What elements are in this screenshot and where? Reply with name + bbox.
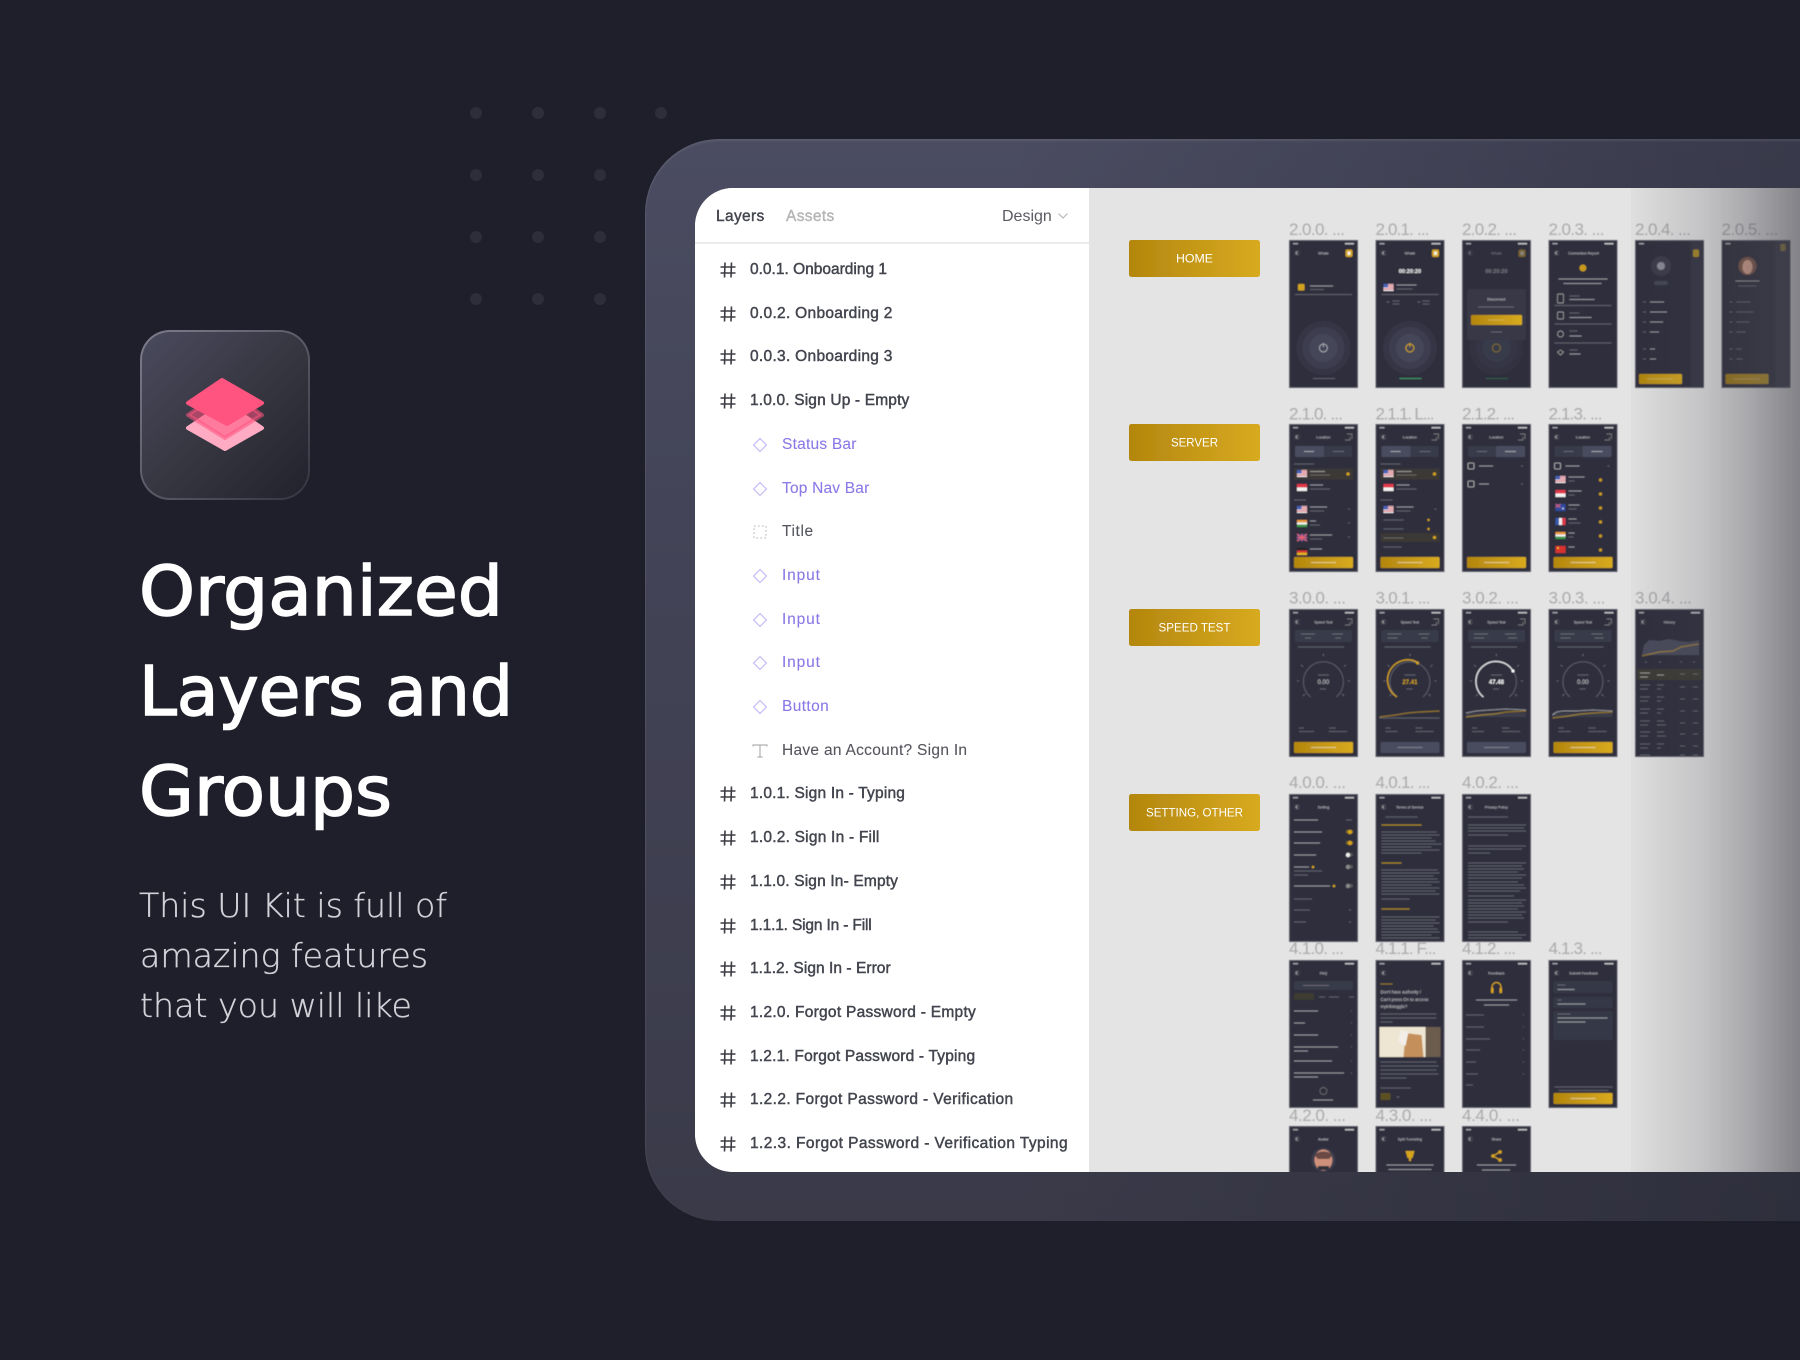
- frame labels: 3.0.2. ...: [1462, 588, 1519, 608]
- screen 3.0.0 speed test idle: Speed Test: [1314, 620, 1333, 624]
- device frame: [645, 139, 1800, 1221]
- screen 2.0.1 connected: 00:20:20: [1399, 269, 1421, 275]
- frame labels: 3.0.1. ...: [1376, 588, 1430, 608]
- screen 2.1.0 location: Location: [1316, 436, 1330, 440]
- component: Input: [752, 654, 821, 671]
- frame labels: 2.0.2. ...: [1462, 220, 1517, 239]
- screen 3.0.2 speed test upload: 47.48: [1489, 680, 1505, 686]
- screen 4.0.0 setting: [1289, 794, 1358, 942]
- subtitle text: This UI Kit is full of: [139, 887, 448, 925]
- screen 4.1.1 article: [1376, 960, 1444, 1108]
- frame labels: 3.0.4. ...: [1635, 588, 1692, 608]
- layer: 1.2.2. Forgot Password - Verification: 1.2.2. Forgot Password - Verification: [750, 1091, 1014, 1108]
- group: Title: Title: [782, 523, 814, 540]
- frame labels: 2.1.0. ...: [1289, 404, 1343, 424]
- screen: figma window: [695, 188, 1800, 1172]
- frame labels: 4.4.0. ...: [1462, 1106, 1520, 1125]
- screen 2.0.3 connection report: [1549, 240, 1617, 388]
- component: Input: Input: [782, 567, 821, 584]
- phone screens: [1289, 240, 1790, 1274]
- title: Organized: [139, 552, 503, 632]
- screen 2.1.1 location expanded: [1376, 424, 1444, 572]
- screen 3.0.4 history: [1635, 609, 1704, 757]
- component: Input: Input: [782, 611, 821, 628]
- frame labels: 2.0.4. ...: [1635, 220, 1691, 239]
- screen 4.1.0 faq: FAQ: [1320, 972, 1327, 976]
- icon: layers app tile: [140, 330, 310, 500]
- subtitle text: that you will like: [140, 987, 412, 1025]
- screen 4.1.3 submit feedback: Submit Feedback: [1569, 972, 1598, 976]
- text layer: Have an Account? Sign In: Have an Account? Sign In: [782, 742, 967, 759]
- title: [139, 552, 513, 832]
- screen 2.0.3 connection report: Connection Report: [1568, 252, 1599, 256]
- screen 2.0.1 connected: Whale: [1405, 252, 1415, 256]
- frame labels: 2.0.5. ...: [1722, 220, 1778, 239]
- tab: Design: Design: [1002, 208, 1052, 224]
- layer: 0.0.2. Onboarding 2: 0.0.2. Onboarding 2: [750, 305, 893, 322]
- panel: canvas with screens: [1129, 188, 1800, 1172]
- screen 2.0.5 profile menu: [1722, 240, 1790, 388]
- panel: layers sidebar: [695, 188, 1089, 1172]
- frame labels: [1289, 220, 1778, 1125]
- screen 4.4.0 share: [1462, 1126, 1531, 1274]
- frame labels: 3.0.3. ...: [1548, 588, 1606, 608]
- frame labels: 3.0.0. ...: [1289, 588, 1346, 608]
- component: Status Bar: Status Bar: [782, 436, 857, 453]
- header divider: [695, 242, 1089, 244]
- frame labels: 4.1.1. F...: [1376, 939, 1436, 958]
- subtitle text: amazing features: [140, 937, 428, 975]
- frame labels: 2.1.2. ...: [1462, 404, 1515, 424]
- layer: 1.2.1. Forgot Password - Typing: 1.2.1. Forgot Password - Typing: [750, 1048, 975, 1065]
- layer: 1.2.0. Forgot Password - Empty: 1.2.0. Forgot Password - Empty: [750, 1004, 976, 1021]
- screen 3.0.3 speed test done: 0.00: [1577, 680, 1589, 686]
- screen 4.2.0 avatar: [1289, 1126, 1358, 1274]
- component: Input: [752, 611, 821, 628]
- frame labels: 4.3.0. ...: [1376, 1106, 1432, 1125]
- screen 4.0.2 privacy policy: [1462, 794, 1531, 942]
- screen 4.3.0 split tunneling: Split Tunneling: [1398, 1138, 1422, 1142]
- screen 2.1.3 location list: Location: [1576, 436, 1590, 440]
- frame labels: 2.0.3. ...: [1548, 220, 1604, 239]
- frame labels: 4.1.2. ...: [1462, 939, 1516, 958]
- screen 3.0.0 speed test idle: 0.00: [1318, 680, 1330, 686]
- title: Groups: [139, 752, 392, 832]
- group: Title: [753, 523, 814, 540]
- screen 2.0.2 disconnect modal: Disconnect: [1487, 298, 1506, 302]
- layer: 1.1.2. Sign In - Error: 1.1.2. Sign In - Error: [750, 960, 891, 977]
- layer: 1.1.0. Sign In- Empty: 1.1.0. Sign In- Empty: [750, 873, 898, 890]
- screen 3.0.1 speed test download: [1376, 609, 1444, 757]
- section button: SETTING, OTHER: [1129, 794, 1260, 831]
- screen 4.4.0 share: Share: [1491, 1138, 1501, 1142]
- screen 3.0.3 speed test done: [1549, 609, 1617, 757]
- screen 2.1.2 location search: [1462, 424, 1531, 572]
- section button: SETTING, OTHER: SETTING, OTHER: [1146, 808, 1243, 820]
- subtitle text: [139, 887, 448, 1025]
- section button: SPEED TEST: SPEED TEST: [1158, 622, 1230, 634]
- component: Button: Button: [782, 698, 829, 715]
- frame labels: 2.1.1. L...: [1376, 404, 1434, 424]
- layer: 1.2.3. Forgot Password - Verification Typing: 1.2.3. Forgot Password - Verification Typing: [750, 1135, 1068, 1152]
- screen 2.0.0 home: Whale: [1318, 252, 1329, 256]
- frame labels: 2.1.3. ...: [1548, 404, 1602, 424]
- screen 4.1.2 feedback: Feedback: [1488, 972, 1505, 976]
- frame labels: 4.0.0. ...: [1289, 773, 1346, 792]
- component: Top Nav Bar: Top Nav Bar: [782, 480, 870, 496]
- icon: chevron: [1058, 213, 1068, 219]
- screen 2.1.3 location list: [1549, 424, 1617, 572]
- screen 2.1.2 location search: Location: [1489, 436, 1503, 440]
- layer: 0.0.1. Onboarding 1: 0.0.1. Onboarding 1: [750, 261, 887, 278]
- screen 3.0.4 history: History: [1664, 620, 1675, 624]
- screen 4.0.1 terms of service: Terms of Service: [1396, 806, 1424, 810]
- component: Input: [752, 567, 821, 584]
- screen 3.0.2 speed test upload: [1462, 609, 1531, 757]
- screen 2.0.1 connected: [1376, 240, 1444, 388]
- frame labels: 2.0.0. ...: [1289, 220, 1345, 239]
- title: Layers and: [139, 652, 513, 732]
- section button: HOME: HOME: [1176, 254, 1213, 266]
- screen 4.0.2 privacy policy: Privacy Policy: [1485, 806, 1508, 810]
- screen 2.0.0 home: [1289, 240, 1358, 388]
- screen 4.1.2 feedback: [1462, 960, 1531, 1108]
- screen 3.0.2 speed test upload: Speed Test: [1487, 620, 1506, 624]
- frame labels: 2.0.1. ...: [1376, 220, 1430, 239]
- section button: SPEED TEST: [1129, 609, 1260, 646]
- screen 2.1.1 location expanded: Location: [1403, 436, 1417, 440]
- screen 4.1.0 faq: [1289, 960, 1358, 1108]
- layer: 0.0.3. Onboarding 3: 0.0.3. Onboarding 3: [750, 348, 893, 365]
- screen 2.0.2 disconnect modal: Whale: [1491, 252, 1502, 256]
- layer: 1.0.2. Sign In - Fill: 1.0.2. Sign In - Fill: [750, 829, 880, 846]
- layer: 1.0.0. Sign Up - Empty: 1.0.0. Sign Up - Empty: [750, 392, 909, 409]
- layer: 1.0.1. Sign In - Typing: 1.0.1. Sign In - Typing: [750, 785, 905, 802]
- section button: SERVER: [1129, 424, 1260, 461]
- screen 3.0.1 speed test download: Speed Test: [1401, 620, 1419, 624]
- layer: 1.1.1. Sign In - Fill: 1.1.1. Sign In - Fill: [750, 916, 872, 934]
- screen 2.0.2 disconnect modal: [1462, 240, 1531, 388]
- screen 4.3.0 split tunneling: [1376, 1126, 1444, 1274]
- screen 3.0.0 speed test idle: [1289, 609, 1358, 757]
- screen 2.1.0 location: [1289, 424, 1358, 572]
- screen 3.0.1 speed test download: 27.41: [1402, 680, 1418, 686]
- screen 2.0.2 disconnect modal: 00:20:20: [1485, 269, 1508, 275]
- screen 4.1.1 article: myinfotoggle?: [1380, 1004, 1408, 1009]
- screen 4.1.1 article: Can't press On to access: [1380, 997, 1428, 1002]
- screen 4.0.1 terms of service: [1376, 794, 1444, 942]
- right edge fade overlay: [1631, 188, 1800, 1172]
- screen 2.0.4 side menu: [1635, 240, 1704, 388]
- frame labels: 4.1.3. ...: [1548, 939, 1602, 958]
- component: Input: Input: [782, 654, 821, 671]
- screen 4.0.0 setting: Setting: [1318, 806, 1329, 810]
- decorative dot grid: [470, 107, 667, 305]
- screen 4.1.3 submit feedback: [1549, 960, 1617, 1108]
- frame labels: 4.2.0. ...: [1289, 1106, 1346, 1125]
- section button: SERVER: SERVER: [1171, 438, 1218, 450]
- screen 4.2.0 avatar: Avatar: [1318, 1138, 1329, 1142]
- screen 4.1.1 article: Don't have authority /: [1380, 990, 1422, 994]
- frame labels: 4.1.0. ...: [1289, 939, 1344, 958]
- screen 3.0.3 speed test done: Speed Test: [1574, 620, 1592, 624]
- component: Button: [752, 698, 829, 715]
- tab: Assets: Assets: [786, 208, 835, 224]
- frame labels: 4.0.2. ...: [1462, 773, 1519, 792]
- section button: HOME: [1129, 240, 1260, 277]
- tab: Layers: Layers: [716, 208, 765, 224]
- frame labels: 4.0.1. ...: [1376, 773, 1430, 792]
